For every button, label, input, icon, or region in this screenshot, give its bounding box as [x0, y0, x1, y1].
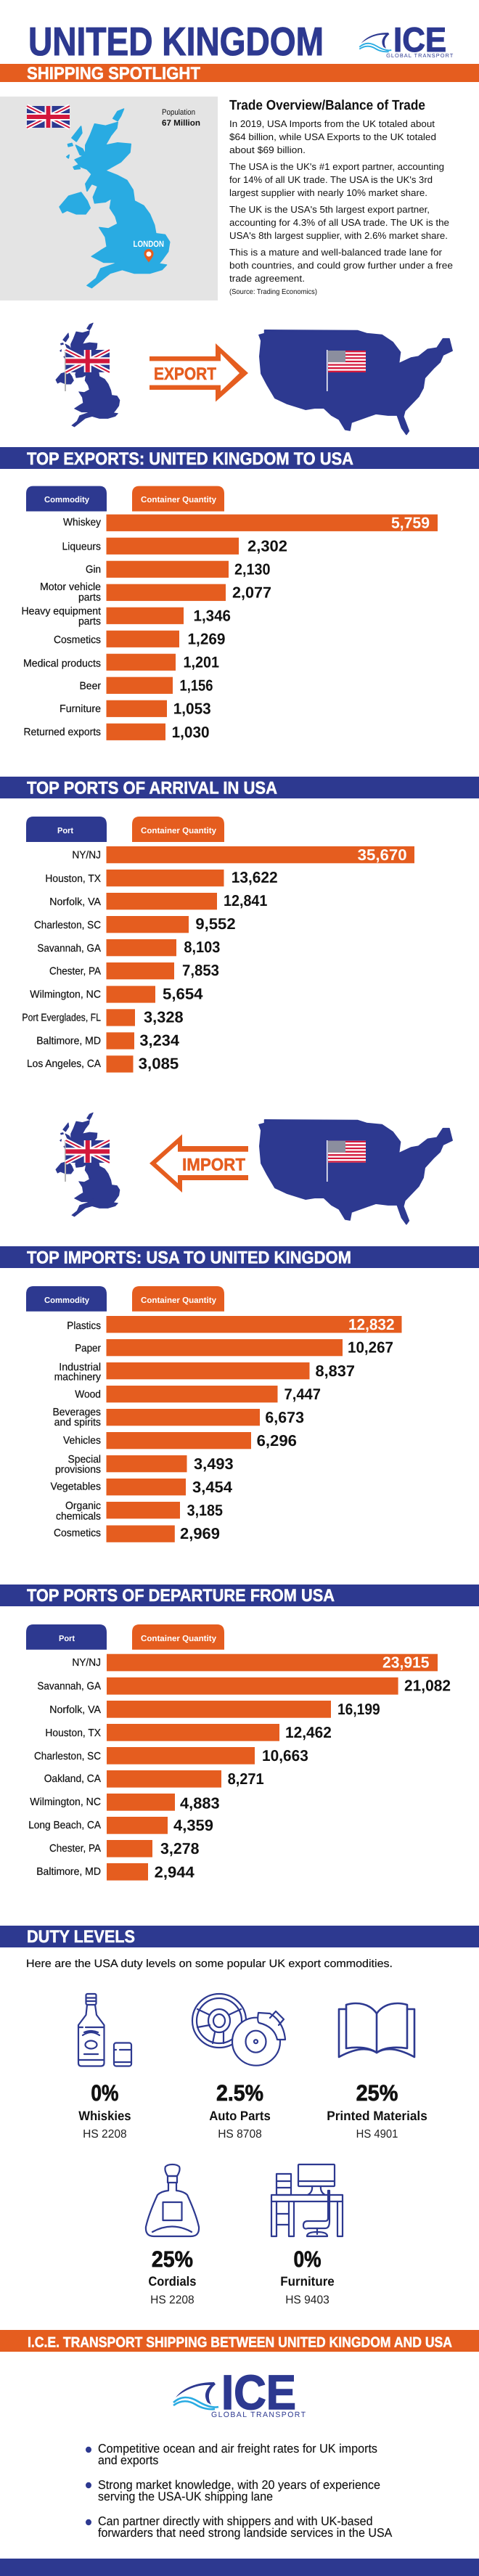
values: [172, 514, 430, 741]
heading: duty levels: [0, 1926, 479, 1947]
values: 3,454: [192, 1479, 232, 1496]
category labels: Heavy equipment: [22, 605, 101, 617]
text block: trade overview: trade agreement.: [229, 273, 305, 284]
icon: cordial bottle: [146, 2164, 199, 2236]
category labels: Gin: [86, 564, 101, 576]
category labels: Cosmetics: [54, 1528, 101, 1540]
port labels: Norfolk, VA: [49, 1704, 101, 1716]
bars: [106, 1316, 402, 1542]
heading: top exports: TOP EXPORTS: UNITED KINGDOM TO USA: [27, 449, 353, 469]
category labels: Vehicles: [63, 1435, 101, 1447]
values: 4,883: [180, 1795, 220, 1812]
chart: top exports: [22, 486, 438, 741]
port labels: NY/NJ: [72, 1657, 101, 1669]
text block: trade overview: Trade Overview/Balance of Trade: [229, 98, 425, 113]
values: 1,269: [187, 630, 226, 647]
duty item: printed materials: [327, 2003, 427, 2140]
values: 4,359: [173, 1817, 213, 1834]
HS code: HS 8708: [218, 2128, 262, 2140]
category labels: parts: [78, 616, 101, 627]
tab: container quantity: Container Quantity: [141, 1635, 217, 1643]
logo: ICE Global Transport (top): GLOBAL TRANSPORT: [386, 53, 454, 59]
title: UNITED KINGDOM: [28, 19, 324, 64]
bullet 3: [86, 2514, 393, 2540]
graphic: import USA to UK: [56, 1113, 452, 1224]
bullet 1: and exports: [98, 2453, 158, 2467]
category labels: provisions: [55, 1464, 101, 1476]
values: 8,271: [228, 1770, 264, 1788]
bullet 2: [86, 2478, 380, 2503]
values: 7,447: [284, 1386, 321, 1403]
map: USA: [259, 1120, 452, 1224]
port labels: Oakland, CA: [44, 1773, 101, 1785]
category labels: Special: [68, 1454, 101, 1465]
panel: UK map: [0, 97, 218, 300]
category labels: Whiskey: [63, 517, 102, 528]
icon: open book: [339, 2003, 414, 2057]
values: 5,654: [163, 986, 203, 1003]
flag: USA on pole: [327, 1140, 366, 1182]
heading: top ports of departure: TOP PORTS OF DEPARTURE FROM USA: [27, 1586, 335, 1606]
map: United Kingdom: [60, 109, 170, 288]
port labels: Houston, TX: [45, 1727, 101, 1739]
arrow: import: [150, 1134, 248, 1193]
port labels: Chester, PA: [49, 965, 101, 977]
arrow: export: [150, 343, 248, 402]
heading: top ports of departure: [0, 1585, 479, 1606]
values: 35,670: [358, 846, 407, 864]
category labels: parts: [78, 592, 101, 604]
banner: shipping spotlight: SHIPPING SPOTLIGHT: [27, 64, 200, 83]
values: 3,493: [194, 1455, 234, 1473]
category labels: [22, 517, 102, 738]
port labels: Savannah, GA: [37, 1681, 101, 1693]
values: 21,082: [404, 1677, 451, 1694]
values: 5,759: [391, 514, 430, 531]
category labels: Organic: [65, 1500, 101, 1512]
banner: shipping spotlight: [0, 64, 479, 83]
port labels: Savannah, GA: [37, 943, 101, 954]
chart: ports of arrival: [22, 817, 414, 1073]
tab: container quantity: [132, 1286, 224, 1312]
values: 9,552: [195, 915, 236, 933]
port labels: Baltimore, MD: [36, 1035, 101, 1047]
heading: top exports: [0, 447, 479, 469]
commodity name: Cordials: [148, 2274, 196, 2289]
values: [139, 846, 407, 1073]
text block: trade overview: about $69 billion.: [229, 144, 306, 155]
tab: container quantity: Container Quantity: [141, 496, 217, 504]
category labels: [51, 1320, 102, 1540]
tab: commodity: [26, 1286, 107, 1312]
values: 3,328: [144, 1009, 184, 1026]
values: 12,462: [285, 1724, 332, 1741]
tab: commodity: Commodity: [44, 496, 90, 504]
text block: trade overview: $64 billion, while USA Exports to the UK totaled: [229, 131, 436, 142]
map: USA: [259, 330, 452, 435]
values: 1,030: [172, 724, 210, 741]
category labels: Wood: [75, 1389, 101, 1401]
population: [162, 108, 200, 128]
rate: 2.5%: [216, 2080, 263, 2106]
bullet 3: Can partner directly with shippers and with UK-based: [98, 2514, 373, 2528]
category labels: Plastics: [67, 1320, 101, 1332]
logo: ICE Global Transport (bottom): GLOBAL TRANSPORT: [211, 2411, 306, 2419]
values: 3,278: [160, 1840, 200, 1857]
values: 1,201: [183, 653, 219, 671]
graphic: export UK to USA: [56, 323, 452, 435]
text block: trade overview: for 14% of all UK trade. The USA is the UK's 3rd: [229, 174, 433, 185]
icon: whiskey bottle and glass: [78, 1994, 131, 2066]
values: 2,130: [234, 560, 271, 578]
tab: port: Port: [59, 1635, 75, 1643]
text block: trade overview: both countries, and could grow further under a free: [229, 260, 453, 271]
heading: top imports: [0, 1246, 479, 1268]
values: 10,267: [348, 1338, 393, 1356]
bullet 3: forwarders that need strong landside services in the USA: [98, 2526, 393, 2540]
footer band: [0, 2559, 479, 2576]
port labels: Los Angeles, CA: [27, 1058, 101, 1070]
rate: 25%: [152, 2246, 193, 2272]
logo: ICE Global Transport (top): ICE: [393, 21, 446, 60]
port labels: Charleston, SC: [34, 920, 101, 931]
logo: ICE Global Transport (top): [359, 21, 454, 60]
values: 3,234: [139, 1032, 179, 1050]
London label: LONDON: [134, 239, 164, 249]
text block: trade overview: The UK is the USA's 5th largest export partner,: [229, 204, 430, 215]
port labels: Charleston, SC: [34, 1751, 101, 1762]
values: 13,622: [232, 869, 278, 886]
port labels: [22, 849, 101, 1070]
port labels: Norfolk, VA: [49, 896, 101, 908]
arrow label: IMPORT: [182, 1156, 245, 1174]
values: 12,841: [224, 892, 267, 909]
flag: UK on pole: [65, 350, 110, 391]
commodity name: Auto Parts: [209, 2109, 271, 2123]
tab: port: [26, 817, 107, 842]
arrow label: EXPORT: [154, 364, 216, 384]
logo: ICE Global Transport (bottom): [173, 2366, 306, 2420]
text block: trade overview: [229, 98, 453, 296]
values: 1,346: [193, 607, 231, 624]
text block: trade overview: (Source: Trading Economics): [229, 288, 317, 296]
tab: port: Port: [57, 827, 73, 835]
tab: container quantity: [132, 1624, 224, 1650]
heading: duty levels: DUTY LEVELS: [27, 1927, 135, 1947]
text block: trade overview: largest supplier with nearly 10% market share.: [229, 187, 427, 198]
values: 23,915: [382, 1653, 430, 1671]
category labels: Returned exports: [23, 727, 101, 738]
commodity name: Whiskies: [78, 2109, 131, 2123]
tab: container quantity: [132, 817, 224, 842]
tab: container quantity: Container Quantity: [141, 827, 217, 835]
category labels: and spirits: [54, 1417, 101, 1428]
rate: 25%: [356, 2080, 398, 2106]
port labels: Baltimore, MD: [36, 1866, 101, 1878]
values: [180, 1316, 395, 1542]
values: 3,085: [139, 1055, 179, 1073]
bars: [107, 1654, 438, 1881]
bars: [106, 515, 438, 740]
tab: container quantity: Container Quantity: [141, 1296, 217, 1305]
values: 12,832: [348, 1316, 395, 1333]
values: 2,077: [232, 584, 271, 601]
duty item: furniture: [271, 2164, 343, 2306]
population: Population: [162, 108, 195, 117]
bars: [106, 846, 414, 1073]
port labels: Wilmington, NC: [30, 989, 101, 1000]
category labels: machinery: [54, 1372, 102, 1383]
category labels: Beverages: [52, 1407, 101, 1418]
values: 7,853: [182, 962, 219, 979]
flag: USA on pole: [327, 350, 366, 391]
rate: 0%: [91, 2080, 118, 2106]
icon: location pin: [144, 249, 154, 263]
tab: commodity: Commodity: [44, 1296, 90, 1305]
values: 16,199: [337, 1701, 380, 1718]
duty item: whiskies: [78, 1994, 131, 2140]
category labels: Cosmetics: [54, 634, 101, 646]
values: 6,296: [257, 1432, 297, 1449]
values: 6,673: [265, 1409, 304, 1426]
bullet 2: serving the USA-UK shipping lane: [98, 2490, 273, 2503]
port labels: Wilmington, NC: [30, 1796, 101, 1808]
tab: port: [26, 1624, 107, 1650]
category labels: Beer: [80, 681, 101, 692]
values: 2,944: [155, 1864, 195, 1881]
values: [155, 1653, 451, 1881]
values: 2,969: [180, 1525, 220, 1542]
values: 3,185: [187, 1502, 223, 1519]
icon: steering wheel and brake disc: [192, 1994, 285, 2066]
tab: commodity: [26, 486, 107, 511]
chart: top imports: [26, 1286, 402, 1542]
port labels: NY/NJ: [72, 849, 101, 861]
port labels: Port Everglades, FL: [22, 1012, 101, 1023]
heading: top ports of arrival: [0, 777, 479, 798]
icon: desk with computer and chair: [271, 2164, 343, 2236]
text block: trade overview: The USA is the UK's #1 export partner, accounting: [229, 161, 444, 172]
category labels: Liqueurs: [62, 541, 101, 553]
values: 1,053: [173, 700, 211, 717]
chart: ports of departure: [26, 1624, 451, 1881]
HS code: HS 2208: [150, 2294, 195, 2306]
text block: trade overview: This is a mature and well-balanced trade lane for: [229, 247, 443, 258]
values: 8,837: [315, 1362, 355, 1380]
values: 8,103: [184, 939, 220, 956]
HS code: HS 2208: [83, 2128, 127, 2140]
flag: UK on pole: [65, 1140, 110, 1182]
category labels: Vegetables: [51, 1481, 101, 1493]
text block: trade overview: In 2019, USA Imports from the UK totaled about: [229, 118, 435, 129]
rate: 0%: [293, 2246, 321, 2272]
HS code: HS 4901: [356, 2128, 398, 2140]
category labels: Medical products: [23, 658, 101, 669]
banner: ICE transport shipping: [0, 2330, 479, 2352]
text block: trade overview: USA's 8th largest supplier, with 2.6% market share.: [229, 230, 448, 241]
port labels: Long Beach, CA: [28, 1820, 101, 1831]
commodity name: Furniture: [280, 2274, 335, 2289]
list: ICE benefits: [86, 2442, 393, 2540]
category labels: Furniture: [60, 703, 101, 715]
population: 67 Million: [162, 119, 200, 128]
heading: top imports: TOP IMPORTS: USA TO UNITED KINGDOM: [27, 1248, 351, 1268]
category labels: Paper: [75, 1343, 101, 1354]
values: 1,156: [180, 676, 213, 694]
port labels: Chester, PA: [49, 1843, 101, 1855]
map: UK navy: [56, 1113, 120, 1217]
commodity name: Printed Materials: [327, 2109, 427, 2123]
category labels: Motor vehicle: [40, 581, 101, 593]
text block: trade overview: accounting for 4.3% of all USA trade. The UK is the: [229, 217, 449, 228]
bullet 2: Strong market knowledge, with 20 years of experience: [98, 2478, 380, 2492]
values: 2,302: [247, 537, 287, 555]
category labels: chemicals: [56, 1510, 101, 1522]
bullet 1: [86, 2442, 377, 2467]
HS code: HS 9403: [285, 2294, 329, 2306]
values: 10,663: [262, 1747, 308, 1765]
bullet 1: Competitive ocean and air freight rates for UK imports: [98, 2442, 377, 2456]
category labels: Industrial: [59, 1362, 101, 1373]
tab: container quantity: [132, 486, 224, 511]
intro text: Here are the USA duty levels on some popular UK export commodities.: [26, 1958, 393, 1970]
icon: UK flag: [27, 106, 70, 128]
heading: top ports of arrival: TOP PORTS OF ARRIVAL IN USA: [27, 778, 277, 798]
port labels: Houston, TX: [45, 873, 101, 885]
duty item: cordials: [146, 2164, 199, 2306]
map: UK navy: [56, 323, 120, 427]
port labels: [28, 1657, 101, 1878]
logo: ICE Global Transport (bottom): ICE: [221, 2366, 296, 2420]
duty item: auto parts: [192, 1994, 285, 2140]
